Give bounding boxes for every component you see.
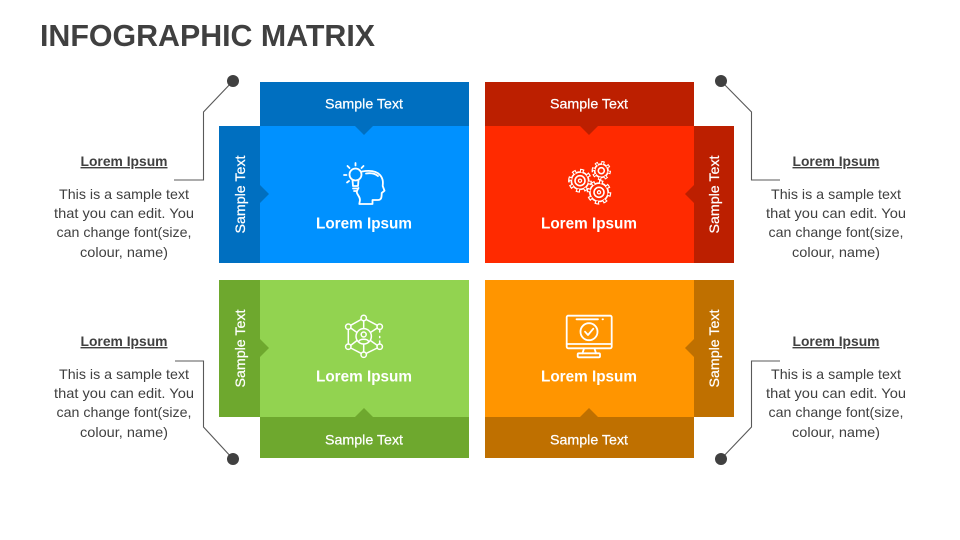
callout heading: bottom right: Lorem Ipsum xyxy=(792,333,880,349)
callout text: bottom right xyxy=(766,366,906,440)
blue main card xyxy=(260,126,469,263)
callout text: top right xyxy=(766,186,906,260)
callout text: bottom right: can change font(size, xyxy=(768,404,904,420)
leader dot: top left xyxy=(227,75,239,87)
panel: blue quadrant xyxy=(219,82,469,263)
green bottom tab label: Sample Text xyxy=(325,432,403,448)
callout text: top left xyxy=(54,186,194,260)
callout text: top left: This is a sample text xyxy=(59,186,189,202)
callout text: top right: that you can edit. You xyxy=(766,205,906,221)
panel: green quadrant xyxy=(219,280,469,458)
blue top tab label: Sample Text xyxy=(325,96,403,112)
callout text: bottom left: This is a sample text xyxy=(59,366,189,382)
callout text: bottom right: that you can edit. You xyxy=(766,385,906,401)
leader line: bottom left xyxy=(175,361,233,459)
callout text: top left: that you can edit. You xyxy=(54,205,194,221)
leader dot: bottom left xyxy=(227,453,239,465)
icon: gears xyxy=(570,162,610,203)
green card label: Lorem Ipsum xyxy=(316,368,412,386)
callout text: top left: colour, name) xyxy=(80,244,168,260)
green main card xyxy=(260,280,469,417)
orange bottom tab label: Sample Text xyxy=(550,432,628,448)
callout text: bottom left: can change font(size, xyxy=(56,404,192,420)
green bottom tab xyxy=(260,408,469,458)
green left tab xyxy=(219,280,269,417)
panel: orange quadrant xyxy=(485,280,734,458)
orange card label: Lorem Ipsum xyxy=(541,368,637,386)
panel: red quadrant xyxy=(485,82,734,263)
red card label: Lorem Ipsum xyxy=(541,216,637,232)
callout: top right xyxy=(715,75,906,260)
leader line: bottom right xyxy=(721,361,780,459)
title: INFOGRAPHIC MATRIX xyxy=(40,18,375,53)
callout text: bottom left: that you can edit. You xyxy=(54,385,194,401)
callout: top left xyxy=(54,75,239,260)
callout text: top right: This is a sample text xyxy=(771,186,901,202)
callout text: top right: colour, name) xyxy=(792,244,880,260)
orange right tab xyxy=(685,280,734,417)
icon: monitor with check xyxy=(567,316,612,357)
leader dot: top right xyxy=(715,75,727,87)
leader line: top left xyxy=(174,81,233,180)
icon: person network xyxy=(346,315,382,357)
orange bottom tab xyxy=(485,408,694,458)
leader line: top right xyxy=(721,81,780,180)
red top tab label: Sample Text xyxy=(550,96,628,112)
red top tab xyxy=(485,82,694,135)
callout heading: bottom left: Lorem Ipsum xyxy=(80,333,168,349)
callout text: bottom left xyxy=(54,366,194,440)
orange main card xyxy=(485,280,694,417)
blue left tab xyxy=(219,126,269,263)
green left tab label: Sample Text xyxy=(232,309,248,388)
callout: bottom left xyxy=(54,333,239,465)
red right tab xyxy=(685,126,734,263)
icon: head with light bulb xyxy=(344,163,384,204)
callout text: bottom left: colour, name) xyxy=(80,424,168,440)
red right tab label: Sample Text xyxy=(706,155,722,234)
blue card label: Lorem Ipsum xyxy=(316,216,412,232)
blue top tab xyxy=(260,82,469,135)
callout text: top right: can change font(size, xyxy=(768,224,904,240)
callout text: top left: can change font(size, xyxy=(56,224,192,240)
blue left tab label: Sample Text xyxy=(232,155,248,234)
callout heading: top left: Lorem Ipsum xyxy=(80,153,168,169)
callout text: bottom right: This is a sample text xyxy=(771,366,901,382)
orange right tab label: Sample Text xyxy=(706,309,722,388)
red main card xyxy=(485,126,694,263)
callout: bottom right xyxy=(715,333,906,465)
callout heading: top right: Lorem Ipsum xyxy=(792,153,880,169)
callout text: bottom right: colour, name) xyxy=(792,424,880,440)
leader dot: bottom right xyxy=(715,453,727,465)
